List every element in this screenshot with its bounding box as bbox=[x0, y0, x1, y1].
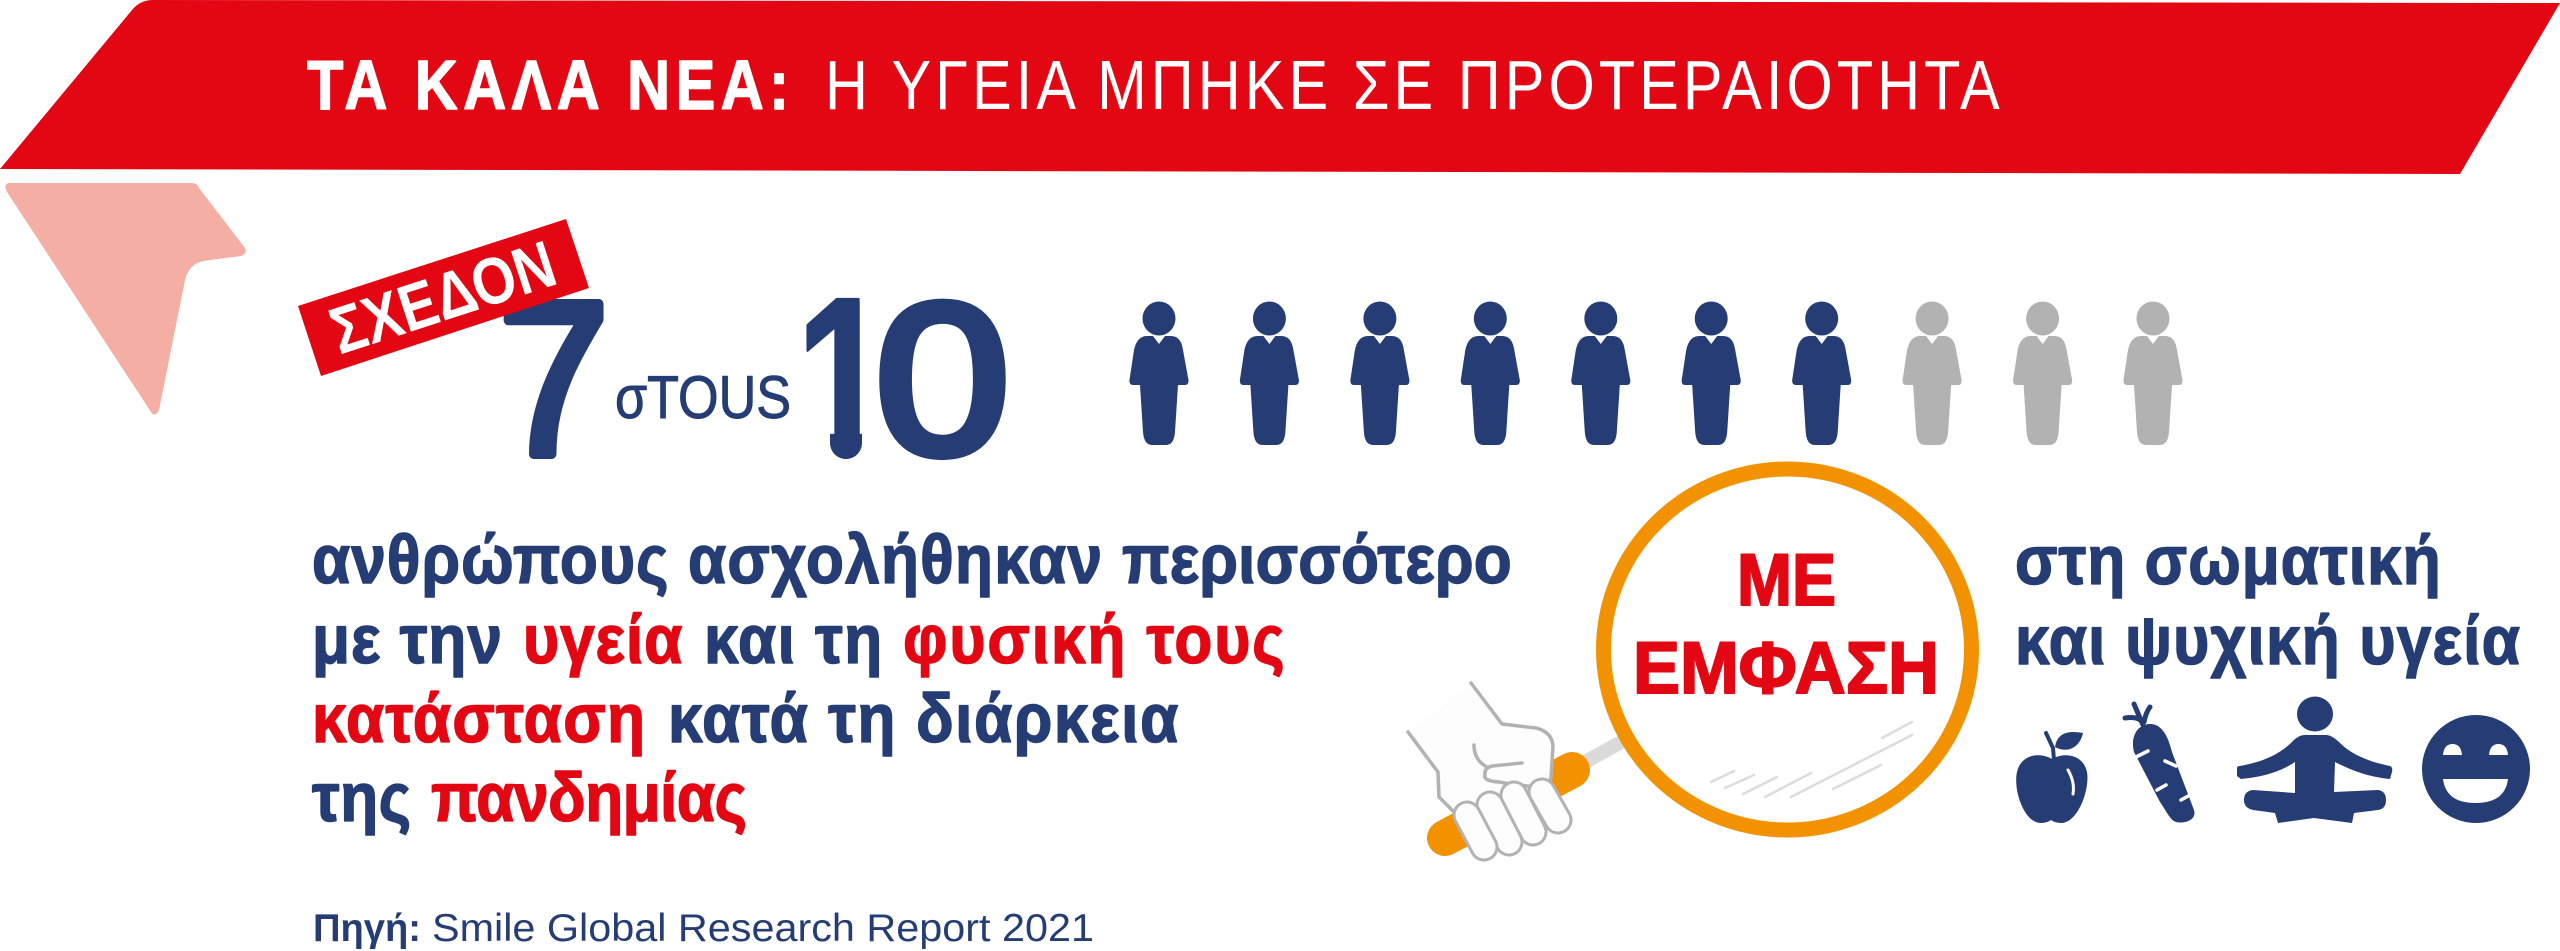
icon: carrot bbox=[2125, 704, 2194, 822]
person 7 bbox=[1792, 302, 1851, 445]
person 10 grey bbox=[2123, 302, 2183, 445]
big number 10: 0 bbox=[876, 260, 1010, 499]
lens bbox=[1604, 469, 1972, 830]
person 1 bbox=[1129, 302, 1189, 445]
person 4 bbox=[1461, 302, 1520, 445]
hand bbox=[1408, 683, 1558, 858]
main text block: κατάσταση bbox=[312, 680, 645, 757]
magnifier handle bbox=[1445, 770, 1572, 838]
main text block: πανδημίας bbox=[431, 759, 747, 836]
right text block: στη σωματική bbox=[2015, 522, 2441, 599]
label: almost: ΣΧΕΔΟΝ bbox=[321, 226, 564, 368]
main text block: ανθρώπους bbox=[312, 521, 668, 598]
red title banner bbox=[0, 0, 2560, 174]
title: Η ΥΓΕΙΑ ΜΠΗΚΕ ΣΕ ΠΡΟΤΕΡΑΙΟΤΗΤΑ bbox=[825, 45, 2000, 124]
lens glare bbox=[1711, 722, 1912, 797]
lens text bbox=[1633, 540, 1939, 709]
magnifier neck bbox=[1585, 740, 1625, 762]
big number 7: 7 bbox=[498, 258, 609, 501]
person 5 bbox=[1571, 302, 1630, 445]
person 6 bbox=[1682, 302, 1741, 445]
fingers bbox=[1467, 792, 1558, 847]
main text block: φυσική τους bbox=[903, 601, 1285, 678]
source line: Πηγή: bbox=[313, 907, 421, 950]
main text block: ασχολήθηκαν bbox=[688, 521, 1102, 598]
word: out of: σTOUS bbox=[615, 364, 791, 431]
lens text: ΜΕ bbox=[1737, 540, 1836, 621]
right text block bbox=[2015, 522, 2520, 679]
main text block bbox=[312, 521, 1512, 836]
person 3 bbox=[1350, 302, 1409, 445]
main text block: της bbox=[312, 759, 411, 836]
big number 10: 1 bbox=[796, 250, 890, 509]
title: ΤΑ ΚΑΛΑ ΝΕΑ: bbox=[307, 45, 789, 124]
title bbox=[307, 45, 2000, 124]
icon: meditating person bbox=[2237, 696, 2392, 823]
magnifying glass with hand bbox=[1408, 469, 1972, 858]
pink arrow decoration bbox=[5, 183, 246, 415]
right text block: και ψυχική υγεία bbox=[2015, 602, 2520, 679]
person 9 grey bbox=[2013, 302, 2072, 445]
main text block: περισσότερο bbox=[1122, 521, 1512, 598]
big number 10 bbox=[806, 298, 1006, 460]
lens text: ΕΜΦΑΣΗ bbox=[1633, 628, 1939, 709]
icon: smiling face bbox=[2422, 715, 2530, 823]
pictogram: 7 of 10 people bbox=[1129, 302, 2183, 445]
source line: Smile Global Research Report 2021 bbox=[432, 907, 1094, 950]
icon: apple bbox=[2016, 732, 2087, 823]
main text block: υγεία bbox=[523, 601, 682, 678]
person 2 bbox=[1240, 302, 1299, 445]
main text block: και τη bbox=[704, 601, 882, 678]
main text block: με την bbox=[312, 601, 502, 678]
person 8 grey bbox=[1903, 302, 1962, 445]
main text block: κατά τη διάρκεια bbox=[668, 680, 1178, 757]
